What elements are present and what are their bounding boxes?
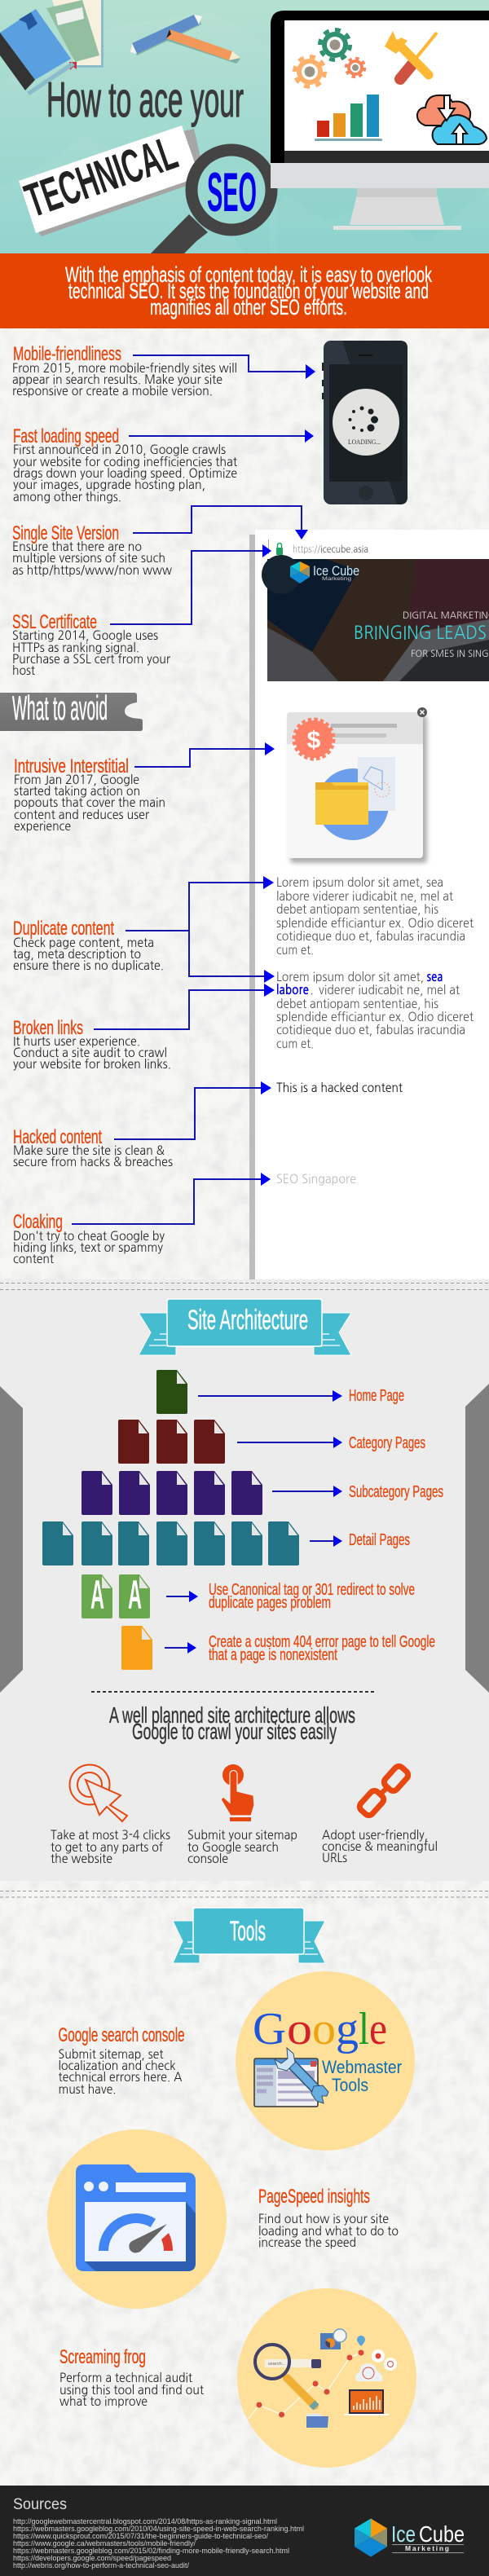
source links [13, 2517, 304, 2570]
arrow: mobile to phone [133, 355, 315, 379]
block: intrusive interstitial: From Jan 2017, Google [14, 774, 139, 786]
block: fast loading speed: among other things. [13, 491, 121, 504]
icon: dollar badge: $ [307, 727, 321, 754]
block: single site version: as http/https/www/non www [12, 565, 172, 577]
arrow and label: subcategory pages [272, 1482, 443, 1501]
block: fast loading speed [13, 425, 238, 504]
block: broken links: your website for broken links. [13, 1059, 171, 1071]
block: mobile-friendliness: Mobile-friendliness [13, 343, 121, 365]
block: screaming frog: what to improve [59, 2396, 148, 2408]
lorem text one: cum et. [276, 945, 314, 957]
title label: technical: TECHNICAL [19, 126, 184, 227]
lorem text two: cotidieque duo et, fabulas iracundia [276, 1024, 465, 1037]
title label: technical [19, 125, 205, 236]
block: pagespeed insights: increase the speed [258, 2237, 356, 2249]
lorem text two [276, 971, 474, 1050]
icon: bar chart [315, 95, 382, 141]
source links: http://webris.org/how-to-perform-a-technical-seo-audit/ [13, 2561, 189, 2570]
source links: https://webmasters.googleblog.com/2010/04/using-site-speed-in-web-search-ranking.html [13, 2525, 304, 2534]
block: screaming frog: using this tool and find out [59, 2384, 205, 2397]
block: screaming frog: Perform a technical audit [59, 2372, 193, 2384]
circle icon: google webmaster tools: Tools [332, 2075, 368, 2095]
arrow and label: canonical tag: duplicate pages problem [209, 1593, 331, 1612]
404 page icon [121, 1626, 152, 1670]
monitor [271, 11, 489, 230]
logo: google wordmark: l [359, 2004, 369, 2054]
arrow: cloaking [72, 1173, 271, 1224]
logo: ice cube small [290, 561, 359, 583]
text: clicks: Take at most 3-4 clicks [51, 1830, 170, 1842]
circle icon: pagespeed [47, 2129, 227, 2309]
text: sitemap: console [187, 1853, 228, 1865]
ribbon: tools: Tools [230, 1916, 266, 1947]
duplicate pages icons: A [90, 1572, 104, 1618]
block: ssl certificate: HTTPs as ranking signal. [12, 642, 139, 654]
ribbon: site architecture: Site Architecture [187, 1305, 308, 1336]
block: mobile-friendliness: responsive or create a mobile version. [12, 385, 213, 398]
lorem text two: sea [427, 971, 443, 984]
lorem text one: Lorem ipsum dolor sit amet, sea [276, 876, 443, 889]
arrow and label: custom 404 [165, 1632, 435, 1664]
pyramid: subcategory pages [82, 1471, 262, 1515]
arrow: duplicate content [126, 876, 275, 983]
block: cloaking: Don't try to cheat Google by [13, 1231, 165, 1243]
arrow and label: home page: Home Page [349, 1386, 404, 1405]
lorem text two: labore [276, 984, 309, 997]
logo: ice cube marketing: Cube [419, 2521, 465, 2547]
arrow: broken links [94, 984, 275, 1029]
icon: social bubbles [372, 2349, 397, 2371]
block: broken links [13, 1017, 171, 1071]
logo: google wordmark: e [369, 2004, 387, 2054]
heading: well planned site architecture: A well planned site architecture allows [109, 1702, 355, 1728]
lorem text one [276, 876, 474, 957]
block: mobile-friendliness: appear in search results. Make your site [12, 374, 222, 386]
block: cloaking: content [13, 1253, 55, 1266]
block: broken links: It hurts user experience. [13, 1036, 140, 1048]
block: pagespeed insights: Find out how is your site [258, 2213, 389, 2226]
block: broken links: Conduct a site audit to crawl [13, 1047, 167, 1059]
circle icon: google webmaster tools [236, 1971, 415, 2151]
block: google search console: Google search console [59, 2024, 184, 2046]
arrow and label: canonical tag [166, 1580, 415, 1612]
text: clicks: to get to any parts of [51, 1842, 164, 1854]
title: how to ace your: How to ace your [46, 73, 244, 127]
pyramid: home page [156, 1370, 187, 1414]
lorem text two: . [310, 984, 314, 997]
icon: map pin [357, 2336, 365, 2346]
block: google search console: Submit sitemap, set [59, 2049, 164, 2061]
text: clicks [51, 1830, 170, 1865]
duplicate pages icons [82, 1572, 150, 1618]
orange intro band: magnifies all other SEO efforts. [150, 295, 347, 319]
icon: tablet chart [345, 2389, 389, 2415]
browser address bar [268, 539, 368, 555]
website screenshot [262, 555, 489, 681]
icon: magnifier with seo: SEO [207, 161, 257, 223]
block: hacked content: secure from hacks & breaches [13, 1156, 173, 1169]
block: single site version: multiple versions of site such [12, 553, 165, 565]
arrow: ssl certificate [110, 544, 271, 624]
banner: what to avoid [0, 689, 143, 731]
logo: ice cube small: Ice Cube [313, 563, 359, 579]
circle icon: google webmaster tools: Webmaster [322, 2057, 402, 2077]
logo: ice cube small: Marketing [322, 577, 351, 582]
block: mobile-friendliness: From 2015, more mobile-friendly sites will [12, 363, 237, 375]
block: intrusive interstitial: popouts that cover the main [14, 797, 165, 809]
arrow and label: custom 404: that a page is nonexistent [209, 1645, 337, 1664]
lorem text two: Lorem ipsum dolor sit amet, [276, 971, 424, 984]
browser address bar: https:// [293, 544, 320, 554]
icon: magnifier [255, 2345, 316, 2407]
block: google search console [59, 2024, 184, 2096]
block: intrusive interstitial: started taking action on [14, 786, 140, 798]
logo: google wordmark: G [253, 2004, 286, 2054]
block: intrusive interstitial: experience [14, 821, 71, 833]
block: fast loading speed: your website for coding inefficiencies that [13, 456, 238, 469]
lorem text two: debet antiopam sententiae, his [276, 997, 438, 1011]
lorem text two: splendide efficiantur ex. Odio diceret [276, 1011, 474, 1024]
block: pagespeed insights: loading and what to do to [258, 2226, 399, 2238]
heading: well planned site architecture [109, 1702, 355, 1744]
text: sitemap: Submit your sitemap [187, 1830, 297, 1842]
lorem text one: cotidieque duo et, fabulas iracundia [276, 930, 465, 943]
logo: google wordmark: g [336, 2004, 359, 2054]
block: hacked content: Make sure the site is clean & [13, 1145, 165, 1157]
circle icon: screaming frog audit: search... [268, 2362, 286, 2367]
arrow and label: home page [198, 1386, 404, 1405]
icon: dollar badge [293, 719, 334, 760]
heading: sources: Sources [13, 2496, 67, 2513]
text: sitemap [187, 1830, 297, 1865]
hero panel [0, 0, 489, 253]
arrow: speed to phone [129, 429, 314, 443]
source links: http://googlewebmastercentral.blogspot.com/2014/08/https-as-ranking-signal.html [13, 2517, 277, 2526]
ribbon: tools [173, 1908, 325, 1963]
logo: ice cube marketing [355, 2518, 465, 2557]
block: fast loading speed: First announced in 2010, Google crawls [13, 444, 226, 456]
lorem text one: splendide efficiantur ex. Odio diceret [276, 917, 474, 930]
duplicate pages icons: A [128, 1572, 142, 1618]
icon: tapping hand [221, 1764, 254, 1821]
icon: pie tile and clock [320, 2329, 346, 2349]
ribbon: site architecture [139, 1299, 351, 1355]
block: google search console: technical errors here. A [59, 2072, 183, 2084]
block: fast loading speed: drags down your loading speed. Optimize [13, 468, 237, 480]
block: ssl certificate: SSL Certificate [12, 611, 97, 633]
right white panel [249, 530, 489, 1279]
icon: wrench and screwdriver [385, 31, 437, 79]
block: hacked content: Hacked content [13, 1126, 102, 1148]
lorem text one: debet antiopam sententiae, his [276, 903, 438, 916]
circle icon: screaming frog audit [237, 2288, 416, 2468]
icon: phone: LOADING... [348, 438, 381, 446]
block: screaming frog [59, 2346, 205, 2408]
block: intrusive interstitial: content and reduces user [14, 809, 150, 821]
pyramid: category pages [118, 1420, 225, 1464]
lorem text two: viderer iudicabit ne, mel at [319, 984, 460, 997]
block: mobile-friendliness [12, 343, 237, 398]
block: broken links: Broken links [13, 1017, 83, 1039]
block: fast loading speed: your images, upgrade hosting plan, [13, 479, 205, 491]
source links: https://www.google.ca/webmasters/tools/mobile-friendly/ [13, 2539, 196, 2548]
source links: https://webmasters.googleblog.com/2015/02/finding-more-mobile-friendly-search.html [13, 2547, 289, 2556]
icon: chain link [358, 1764, 410, 1817]
block: single site version [12, 522, 172, 577]
block: duplicate content: tag, meta description to [13, 949, 141, 961]
icon: clouds [417, 95, 487, 144]
icon: cloud [355, 2363, 382, 2381]
icon: loading spinner [349, 406, 378, 432]
lorem text two: cum et. [276, 1038, 314, 1050]
block: google search console: must have. [59, 2084, 116, 2096]
block: single site version: Single Site Version [12, 522, 119, 544]
icon: folder [315, 782, 368, 825]
text: seo singapore sample: SEO Singapore [276, 1174, 356, 1186]
icon: gears [295, 29, 365, 86]
popup illustration [287, 707, 427, 863]
block: ssl certificate [12, 611, 171, 677]
block: google search console: localization and check [59, 2060, 176, 2072]
block: screaming frog: Screaming frog [59, 2346, 146, 2368]
source links: https://developers.google.com/speed/pagespeed [13, 2554, 171, 2563]
block: intrusive interstitial: Intrusive Interstitial [14, 755, 129, 777]
arrow: hacked content [114, 1081, 271, 1139]
icon: webmaster window [254, 2059, 318, 2107]
orange intro band [0, 253, 489, 328]
icon: phone [322, 341, 408, 504]
arrow: interstitial [134, 742, 275, 767]
text: urls: concise & meaningful [322, 1841, 438, 1853]
side frame shapes [0, 1384, 489, 1693]
logo: google wordmark: o [312, 2004, 336, 2054]
block: cloaking [13, 1211, 165, 1266]
logo: google wordmark [253, 2004, 387, 2054]
arrow: single site version [133, 506, 308, 539]
block: hacked content [13, 1126, 173, 1169]
text: sitemap: to Google search [187, 1842, 279, 1854]
block: cloaking: Cloaking [13, 1211, 63, 1233]
arrow and label: detail pages: Detail Pages [349, 1530, 410, 1549]
icon: close button [417, 707, 427, 717]
logo: google wordmark: o [287, 2004, 312, 2054]
block: ssl certificate: Purchase a SSL cert from your [12, 654, 171, 666]
heading: well planned site architecture: Google to crawl your sites easily [132, 1719, 337, 1744]
icon: wrench [275, 2048, 328, 2103]
source links: https://www.quicksprout.com/2015/07/31/the-beginners-guide-to-technical-seo/ [13, 2532, 268, 2541]
text: urls [322, 1830, 438, 1865]
block: duplicate content: Duplicate content [13, 918, 114, 940]
text: hacked content sample: This is a hacked content [276, 1081, 403, 1094]
arrow and label: category pages [237, 1433, 425, 1452]
block: ssl certificate: Starting 2014, Google uses [12, 630, 158, 642]
block: fast loading speed: Fast loading speed [13, 425, 119, 447]
text: clicks: the website [51, 1853, 112, 1865]
pyramid: detail pages [42, 1521, 299, 1565]
block: ssl certificate: host [12, 665, 36, 677]
block: single site version: Ensure that there are no [12, 541, 142, 553]
logo: ice cube marketing: Ice [391, 2521, 416, 2547]
arrow and label: detail pages [310, 1530, 410, 1549]
banner: what to avoid: What to avoid [12, 689, 108, 727]
lorem text one: labore viderer iudicabit ne, mel at [276, 890, 453, 903]
block: pagespeed insights [258, 2186, 399, 2249]
icon: click cursor [70, 1765, 127, 1821]
block: intrusive interstitial [14, 755, 165, 833]
browser address bar: icecube.asia [320, 544, 368, 554]
text: urls: URLs [322, 1852, 347, 1865]
arrow and label: category pages: Category Pages [349, 1433, 425, 1452]
block: duplicate content [13, 918, 164, 972]
icon: books [0, 0, 104, 95]
block: pagespeed insights: PageSpeed insights [258, 2186, 370, 2208]
icon: folder blue [306, 2414, 328, 2428]
icon: magnifier with seo [151, 150, 271, 253]
icon: pencils [130, 15, 240, 64]
block: duplicate content: Check page content, meta [13, 937, 154, 949]
footer [0, 2486, 489, 2576]
logo: ice cube marketing: Marketing [405, 2544, 449, 2552]
block: duplicate content: ensure there is no duplicate. [13, 960, 164, 972]
block: cloaking: hiding links, text or spammy [13, 1242, 163, 1254]
text: urls: Adopt user-friendly, [322, 1830, 428, 1842]
